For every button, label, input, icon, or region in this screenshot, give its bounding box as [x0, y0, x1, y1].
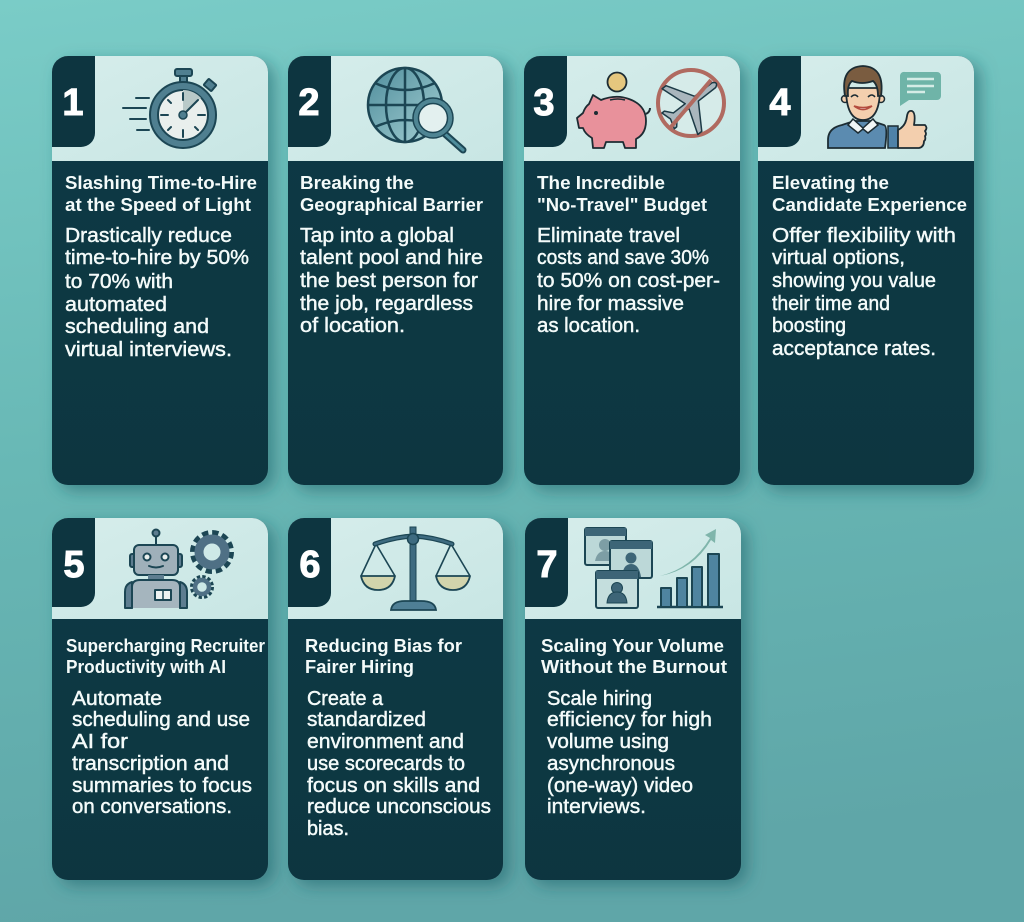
description: standardized [307, 708, 426, 731]
description: virtual interviews. [65, 338, 232, 361]
number 3: 3 [533, 82, 555, 124]
panel: card 2 geographical barrier [288, 56, 503, 485]
description: bias. [307, 817, 349, 840]
description [72, 687, 252, 818]
description: Tap into a global [300, 224, 454, 247]
title: Productivity with AI [66, 656, 226, 677]
title [300, 172, 483, 215]
description: acceptance rates. [772, 337, 936, 360]
description: talent pool and hire [300, 246, 483, 269]
description: interviews. [547, 795, 646, 818]
number 4: 4 [769, 82, 791, 124]
number 1: 1 [62, 82, 84, 124]
description [65, 224, 249, 361]
description: (one-way) video [547, 774, 693, 797]
description: automated [65, 293, 167, 316]
description: volume using [547, 730, 669, 753]
description: as location. [537, 314, 640, 337]
title: Reducing Bias for [305, 635, 462, 656]
number 7: 7 [536, 544, 558, 586]
description: AI for [72, 730, 128, 753]
title [772, 172, 967, 215]
description: the job, regardless [300, 292, 473, 315]
icon: robot and gears [125, 530, 231, 608]
description: the best person for [300, 269, 478, 292]
title [65, 172, 257, 215]
number 2: 2 [298, 82, 320, 124]
description: on conversations. [72, 795, 232, 818]
title: Without the Burnout [541, 656, 727, 677]
description: time-to-hire by 50% [65, 246, 249, 269]
description: virtual options, [772, 246, 905, 269]
description: asynchronous [547, 752, 675, 775]
title: "No-Travel" Budget [537, 194, 707, 215]
panel: card 5 recruiter productivity [52, 518, 268, 880]
description [537, 224, 720, 337]
description: boosting [772, 314, 846, 337]
panel: card 6 reducing bias [288, 518, 503, 880]
description: hire for massive [537, 292, 684, 315]
title: Geographical Barrier [300, 194, 483, 215]
description [772, 224, 956, 360]
icon: balance scale [361, 527, 470, 610]
number 6: 6 [299, 544, 321, 586]
description: Automate [72, 687, 162, 710]
title: Candidate Experience [772, 194, 967, 215]
description: Eliminate travel [537, 224, 680, 247]
title: Elevating the [772, 172, 889, 193]
icon: rising bar chart with arrow [657, 529, 723, 607]
icon: smiling person with thumbs up [828, 66, 941, 148]
description: scheduling and use [72, 708, 250, 731]
description: transcription and [72, 752, 229, 775]
title: Slashing Time-to-Hire [65, 172, 257, 193]
description: to 70% with [65, 270, 173, 293]
title: Scaling Your Volume [541, 635, 724, 656]
description [300, 224, 483, 337]
description: summaries to focus [72, 774, 252, 797]
icon: piggy bank [577, 72, 650, 148]
panel: card 7 scaling volume [525, 518, 741, 880]
title [537, 172, 707, 215]
icon: stopwatch [123, 69, 216, 148]
title [305, 635, 462, 677]
description: of location. [300, 314, 405, 337]
description: efficiency for high [547, 708, 712, 731]
description: to 50% on cost-per- [537, 269, 720, 292]
title: Fairer Hiring [305, 656, 414, 677]
icon: video interview windows [585, 528, 652, 608]
icon: no travel plane [650, 60, 734, 144]
title: at the Speed of Light [65, 194, 251, 215]
description: Scale hiring [547, 687, 652, 710]
description: their time and [772, 292, 890, 315]
description: environment and [307, 730, 464, 753]
description: Create a [307, 687, 384, 710]
panel: card 3 no-travel budget [524, 56, 740, 485]
panel: card 1 time-to-hire [52, 56, 268, 485]
description: reduce unconscious [307, 795, 491, 818]
title: Supercharging Recruiter [66, 635, 265, 656]
description [547, 687, 712, 818]
description: Offer flexibility with [772, 224, 956, 247]
description: focus on skills and [307, 774, 480, 797]
description: Drastically reduce [65, 224, 232, 247]
title [541, 635, 727, 677]
panel: card 4 candidate experience [758, 56, 974, 485]
description: scheduling and [65, 315, 209, 338]
description: use scorecards to [307, 752, 465, 775]
description [307, 687, 491, 840]
icon: globe and magnifier [368, 68, 463, 150]
number 5: 5 [63, 544, 85, 586]
title [66, 635, 265, 677]
title: The Incredible [537, 172, 665, 193]
title: Breaking the [300, 172, 414, 193]
description: showing you value [772, 269, 936, 292]
description: costs and save 30% [537, 246, 709, 269]
